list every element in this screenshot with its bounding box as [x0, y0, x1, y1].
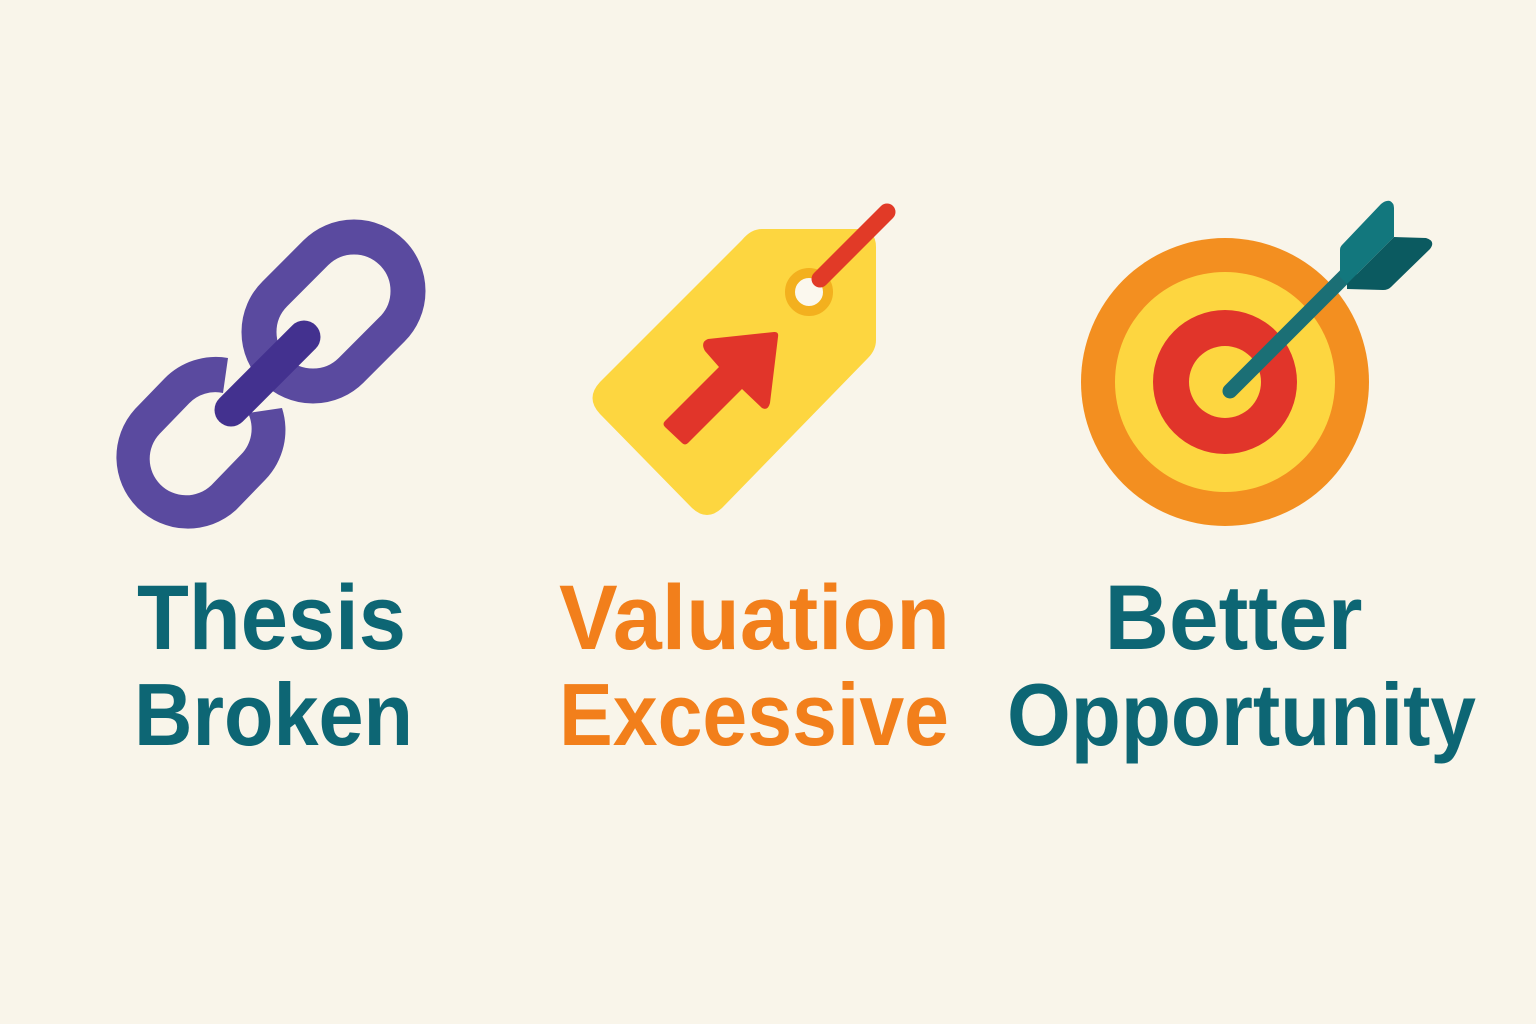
label: Valuation Excessive: Excessive [559, 665, 949, 764]
lower chain link [116, 357, 285, 529]
label: Valuation Excessive [559, 567, 950, 764]
tag string [820, 212, 887, 279]
tag eyelet [790, 273, 828, 311]
label: Thesis Broken: Broken [134, 665, 413, 764]
icon: target with arrow [1081, 201, 1432, 526]
chain connector bar [231, 337, 304, 410]
label: Better Opportunity: Better [1104, 567, 1362, 669]
label: Valuation Excessive: Valuation [559, 567, 950, 669]
label: Better Opportunity: Opportunity [1007, 665, 1476, 764]
label: Better Opportunity [1007, 567, 1476, 764]
label: Thesis Broken [134, 567, 413, 764]
icon: broken chain [116, 215, 430, 529]
upper chain link [237, 215, 430, 408]
label: Thesis Broken: Thesis [137, 567, 406, 669]
arrow fletching [1340, 201, 1432, 290]
up arrow [664, 332, 778, 444]
tag body [592, 229, 876, 515]
icon: price tag [592, 212, 887, 515]
arrow shaft [1230, 271, 1350, 391]
target rings [1081, 238, 1369, 526]
